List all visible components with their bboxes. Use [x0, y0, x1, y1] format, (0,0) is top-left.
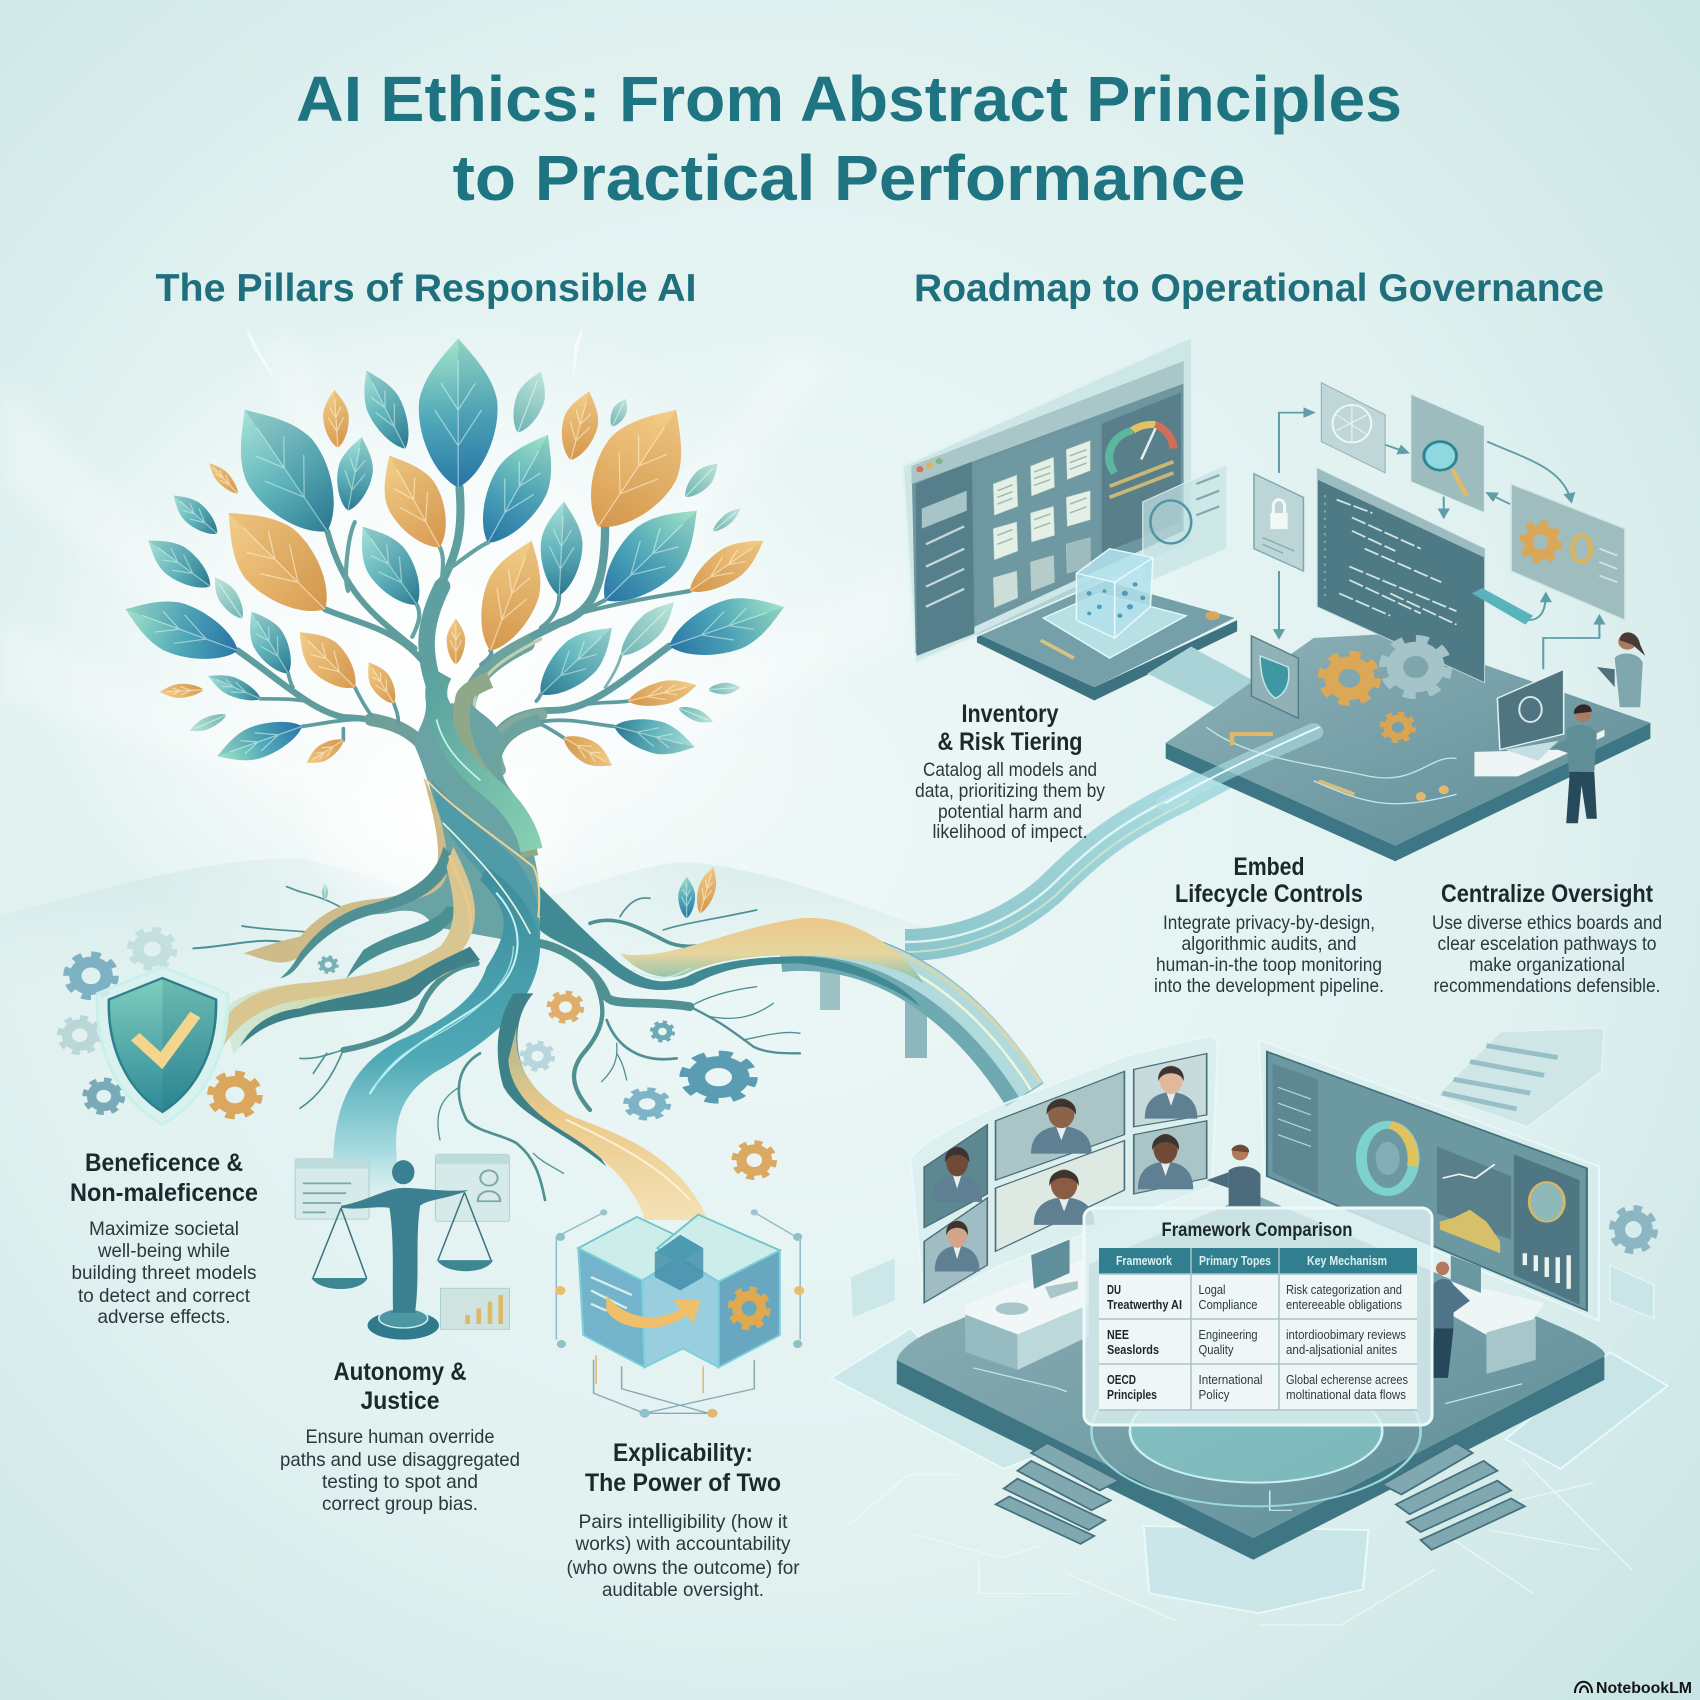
comparison table: Principles [1107, 1387, 1157, 1402]
panel: lock [1254, 474, 1303, 571]
icon: balance figure [295, 1154, 509, 1340]
text: inventory [915, 700, 1105, 843]
text: inventory: data, prioritizing them by [915, 780, 1105, 802]
comparison table: Key Mechanism [1307, 1254, 1387, 1268]
text: explicability: auditable oversight. [602, 1579, 764, 1601]
desk left [965, 1239, 1089, 1370]
text: autonomy: Justice [360, 1387, 440, 1415]
text: inventory: & Risk Tiering [938, 728, 1082, 756]
monitor: model inventory [903, 337, 1227, 663]
comparison table: Compliance [1198, 1297, 1258, 1312]
gold left strand [243, 777, 447, 962]
panel: magnifier [1411, 394, 1485, 513]
glass data cube [1076, 549, 1153, 638]
text: autonomy: testing to spot and [322, 1471, 478, 1493]
steps [996, 1443, 1525, 1550]
main platform [897, 1194, 1605, 1560]
text: lifecycle controls: into the development pipeline. [1154, 975, 1384, 997]
comparison table: Risk categorization and [1286, 1282, 1402, 1297]
person: woman with laptop [1597, 632, 1645, 707]
central twist [432, 780, 540, 940]
platform 2 [1166, 634, 1650, 861]
text: beneficence: well-being while [97, 1240, 230, 1262]
heading: pillars: The Pillars of Responsible AI [156, 267, 696, 310]
text: autonomy: correct group bias. [322, 1493, 478, 1515]
governance scene: inventory and lifecycle platforms [903, 337, 1650, 861]
right teal root [540, 887, 920, 1007]
connecting road [1148, 647, 1258, 707]
main blue ribbon [333, 867, 540, 1200]
text: beneficence: to detect and correct [78, 1285, 251, 1307]
title: AI Ethics: From Abstract Principles [296, 63, 1402, 135]
trunk highlights [370, 720, 690, 1200]
title [296, 63, 1402, 214]
icon: gear [1613, 1209, 1654, 1250]
comparison table: Global echerense acrees [1286, 1372, 1408, 1387]
text: autonomy: paths and use disaggregated [280, 1449, 520, 1471]
panel: settings gear [1511, 484, 1625, 620]
text: explicability: Pairs intelligibility (how it [578, 1511, 788, 1533]
gears [1323, 640, 1447, 741]
text: explicability: Explicability: [613, 1439, 753, 1467]
status pill [1472, 588, 1533, 625]
text: explicability: The Power of Two [585, 1469, 781, 1497]
text: autonomy: Autonomy & [334, 1358, 466, 1386]
code monitor [1317, 468, 1485, 683]
text: inventory: likelihood of impect. [932, 821, 1088, 843]
text: centralize oversight [1432, 880, 1662, 997]
text: beneficence: building threet models [72, 1262, 257, 1284]
person: presenter [1207, 1145, 1260, 1206]
text: explicability [566, 1439, 800, 1601]
outer glass plates [831, 1328, 1667, 1613]
icon: two linked cubes [555, 1209, 804, 1418]
lower gold root [498, 993, 607, 1167]
desk right and analyst [1432, 1255, 1544, 1378]
text: explicability: (who owns the outcome) for [566, 1557, 800, 1579]
comparison table: Seaslords [1107, 1342, 1159, 1357]
comparison table: Quality [1198, 1342, 1234, 1357]
text: inventory: Catalog all models and [923, 759, 1097, 781]
watermark: NotebookLM: NotebookLM [1596, 1680, 1692, 1697]
governance scene: oversight platform [831, 1028, 1667, 1625]
stairs [1437, 1028, 1604, 1127]
video wall [911, 1036, 1218, 1305]
text: beneficence: Maximize societal [89, 1218, 239, 1240]
road from roots to governance platforms [780, 729, 1308, 1095]
flow arrows [1279, 413, 1599, 669]
comparison table: Framework [1116, 1254, 1172, 1268]
text: autonomy: Ensure human override [306, 1426, 494, 1448]
text: lifecycle controls: Integrate privacy-by-design, [1163, 912, 1375, 934]
text: centralize oversight: Centralize Oversight [1441, 880, 1654, 908]
comparison table: Engineering [1198, 1327, 1258, 1342]
title: to Practical Performance [452, 142, 1246, 214]
text: lifecycle controls: algorithmic audits, and [1182, 933, 1356, 955]
text: lifecycle controls: Lifecycle Controls [1175, 880, 1363, 908]
branches [238, 488, 690, 770]
ribbon to shield [223, 947, 473, 1054]
icon: shield with check [97, 967, 228, 1124]
upper left root [347, 907, 460, 978]
panel: shield [1251, 636, 1298, 718]
platform 1 [977, 578, 1237, 701]
text: centralize oversight: make organizational [1469, 954, 1625, 976]
gold middle strand [223, 847, 475, 1047]
comparison table: Logal [1198, 1282, 1226, 1297]
comparison table: International [1198, 1372, 1263, 1387]
panel: brain network [1321, 383, 1385, 473]
pillar icons and gears [61, 930, 804, 1418]
comparison table: moltinational data flows [1286, 1387, 1406, 1402]
framework comparison card [1084, 1208, 1432, 1425]
trunk base [353, 703, 543, 940]
olive strand [461, 680, 530, 857]
text: beneficence: Non-maleficence [70, 1179, 258, 1207]
thin root twigs [193, 887, 800, 1200]
card title: Framework Comparison [1162, 1220, 1352, 1241]
comparison table [1099, 1248, 1417, 1410]
person: man at workstation [1474, 669, 1604, 823]
comparison table: NEE [1107, 1327, 1129, 1342]
heading: roadmap: Roadmap to Operational Governance [914, 267, 1604, 310]
right branch base [494, 720, 540, 790]
text: inventory: potential harm and [938, 801, 1082, 823]
gold ribbon to cube [508, 1027, 708, 1220]
text: centralize oversight: Use diverse ethics boards and [1432, 912, 1662, 934]
comparison table: Primary Topes [1199, 1254, 1271, 1268]
text: beneficence: Beneficence & [85, 1149, 243, 1177]
comparison table: Treatwerthy AI [1107, 1297, 1182, 1312]
comparison table: entereeable obligations [1286, 1297, 1402, 1312]
dark lower strand [240, 947, 480, 1047]
comparison table: Policy [1198, 1387, 1230, 1402]
leaves [116, 338, 792, 775]
tree canopy: branches and leaves [116, 338, 792, 775]
text: beneficence: adverse effects. [98, 1306, 230, 1328]
text: lifecycle controls [1154, 853, 1384, 997]
teal-green band [436, 673, 532, 850]
text: inventory: Inventory [962, 700, 1059, 728]
text: lifecycle controls: Embed [1234, 853, 1304, 881]
comparison table: DU [1107, 1282, 1121, 1297]
text: centralize oversight: clear escelation pathways to [1438, 933, 1657, 955]
road glow on platform [1166, 727, 1319, 803]
comparison table: intordioobimary reviews [1286, 1327, 1406, 1342]
small leaves on root [322, 865, 721, 918]
text: explicability: works) with accountability [575, 1533, 791, 1555]
tree trunk, roots and ribbons [193, 673, 923, 1220]
text: lifecycle controls: human-in-the toop monitoring [1156, 954, 1382, 976]
text: beneficence [70, 1149, 258, 1328]
text: centralize oversight: recommendations defensible. [1434, 975, 1660, 997]
side panels [850, 1257, 1654, 1319]
comparison table: and-aljsationial anites [1286, 1342, 1397, 1357]
scattered gears [61, 930, 774, 1177]
text: autonomy [280, 1358, 520, 1515]
ribbon to bridge [620, 918, 923, 983]
circuit traces [847, 1459, 1632, 1625]
dashboard wall [1259, 1040, 1599, 1321]
comparison table: OECD [1107, 1372, 1136, 1387]
